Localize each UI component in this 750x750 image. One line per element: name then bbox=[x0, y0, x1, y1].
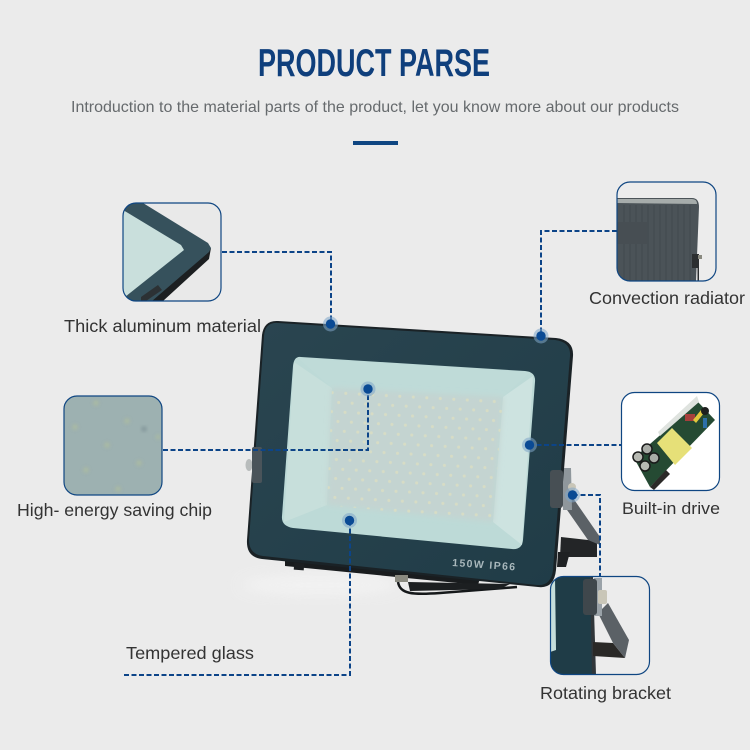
subtitle: Introduction to the material parts of the product, let you know more about our products bbox=[71, 99, 679, 116]
left clip bbox=[252, 447, 262, 483]
label: convection radiator: Convection radiator bbox=[589, 288, 745, 308]
label: tempered glass: Tempered glass bbox=[126, 643, 254, 663]
label: built-in drive: Built-in drive bbox=[622, 499, 720, 518]
label: rotating bracket: Rotating bracket bbox=[540, 683, 671, 703]
leader: built-in drive bbox=[529, 444, 621, 446]
thumbnail: built-in drive circuit board bbox=[622, 392, 720, 490]
rear bracket bbox=[557, 468, 600, 567]
thumbnail: convection radiator bbox=[617, 182, 716, 281]
glass lens bbox=[282, 357, 535, 549]
left bolt bbox=[246, 459, 252, 471]
right clip bbox=[550, 470, 563, 508]
housing front bbox=[249, 323, 570, 585]
marker: tempered glass bbox=[342, 513, 357, 528]
marker: rotating bracket bbox=[565, 488, 580, 502]
thumbnail: energy saving chip bbox=[64, 396, 162, 495]
label: thick aluminum material: Thick aluminum material bbox=[64, 316, 261, 336]
rating label: 150W IP66 bbox=[452, 557, 516, 573]
marker: built-in drive bbox=[522, 438, 537, 452]
floodlight product bbox=[240, 321, 600, 595]
leader: thick aluminum bbox=[222, 252, 331, 323]
leader: convection radiator bbox=[541, 231, 617, 336]
LED panel bbox=[327, 388, 503, 522]
thumbnail: thick aluminum corner bbox=[123, 203, 221, 301]
leader: rotating bracket bbox=[573, 495, 600, 576]
leader: tempered glass bbox=[123, 521, 350, 675]
mounting cable and lower details bbox=[285, 558, 517, 594]
callout leader lines bbox=[123, 231, 621, 675]
marker: convection radiator bbox=[534, 328, 548, 344]
title: PRODUCT PARSE bbox=[258, 42, 490, 85]
ground shadow bbox=[240, 575, 400, 595]
lens top bevel bbox=[298, 358, 530, 397]
outer housing edge bbox=[247, 321, 573, 587]
lens right bevel bbox=[493, 376, 533, 545]
marker: thick aluminum bbox=[323, 316, 338, 332]
title accent bar bbox=[353, 141, 398, 145]
callout marker dots bbox=[323, 316, 580, 528]
leader: energy saving chip bbox=[163, 390, 368, 450]
label: high energy saving chip: High- energy saving chip bbox=[17, 500, 212, 520]
thumbnail: rotating bracket bbox=[550, 576, 650, 675]
LED chip grid bbox=[328, 391, 502, 517]
lens left bevel bbox=[284, 362, 332, 522]
marker: energy saving chip bbox=[360, 382, 376, 396]
